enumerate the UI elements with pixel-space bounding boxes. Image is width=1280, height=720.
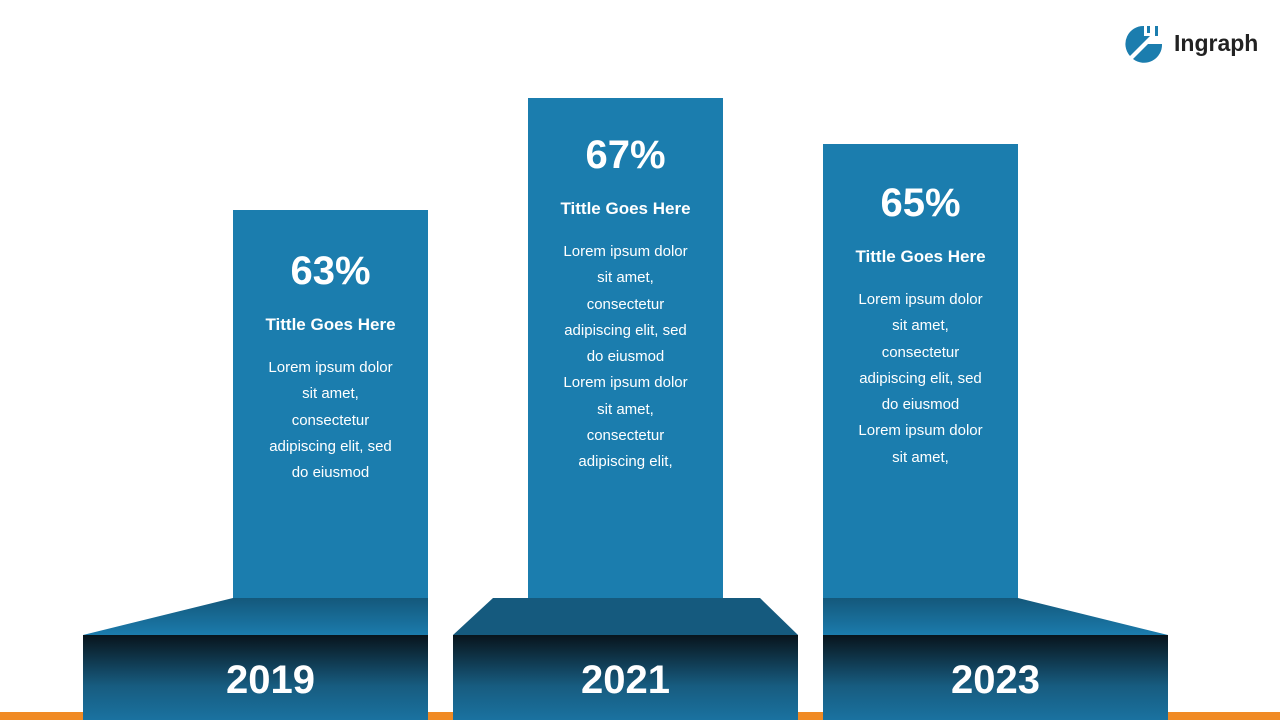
column 2023 text: Lorem ipsum dolor xyxy=(858,422,983,439)
column 2023 text xyxy=(855,181,986,466)
column 2023 text: 65% xyxy=(880,181,961,225)
column 2019 text: Lorem ipsum dolor xyxy=(268,359,393,376)
column 2021 text: adipiscing elit, xyxy=(578,453,673,470)
column 2019 text: sit amet, xyxy=(302,385,359,402)
year 2021: 2021 xyxy=(581,658,670,702)
column 2021 text: sit amet, xyxy=(597,269,654,286)
column 2019 text: adipiscing elit, sed xyxy=(269,438,392,455)
column 2021 text: Lorem ipsum dolor xyxy=(563,374,688,391)
column 2023 text: do eiusmod xyxy=(882,396,959,413)
logo: Ingraph xyxy=(1174,30,1258,56)
column 2019 text xyxy=(265,249,396,481)
column 2019 text: 63% xyxy=(290,249,371,293)
year 2023: 2023 xyxy=(951,658,1040,702)
column 2021 text: Lorem ipsum dolor xyxy=(563,243,688,260)
column 2019 text: Tittle Goes Here xyxy=(265,315,396,334)
column 2021 text: consectetur xyxy=(587,427,664,444)
column 2023 text: sit amet, xyxy=(892,317,949,334)
column 2021 text: sit amet, xyxy=(597,401,654,418)
logo xyxy=(1125,26,1258,63)
column 2021 text: 67% xyxy=(585,133,666,177)
column 2021 text: adipiscing elit, sed xyxy=(564,322,687,339)
column 2023 text: Tittle Goes Here xyxy=(855,247,986,266)
column 2021 text xyxy=(560,133,691,470)
column 2023 text: Lorem ipsum dolor xyxy=(858,291,983,308)
column 2019 text: do eiusmod xyxy=(292,464,369,481)
column 2023 text: adipiscing elit, sed xyxy=(859,370,982,387)
column 2019 text: consectetur xyxy=(292,412,369,429)
column 2023 text: consectetur xyxy=(882,344,959,361)
column 2023 text: sit amet, xyxy=(892,449,949,466)
column 2021 text: consectetur xyxy=(587,296,664,313)
year 2019: 2019 xyxy=(226,658,315,702)
column 2021 text: Tittle Goes Here xyxy=(560,199,691,218)
column 2021 text: do eiusmod xyxy=(587,348,664,365)
